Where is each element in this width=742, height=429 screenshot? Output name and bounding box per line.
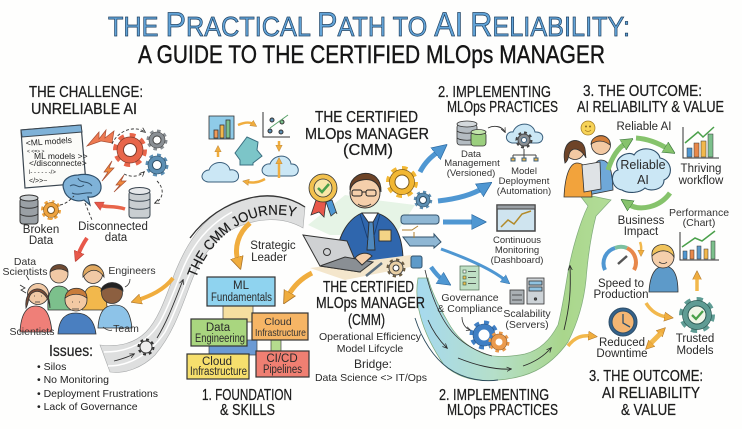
label: continuous monitoring: Continuous xyxy=(493,235,541,246)
label: broken data xyxy=(23,224,59,247)
heading: foundation: & SKILLS xyxy=(220,402,275,419)
arrow: red down xyxy=(78,238,87,255)
label: scientists: Scientists xyxy=(10,326,54,338)
icon: right database xyxy=(129,188,150,218)
heading: outcome bottom: AI RELIABILITY xyxy=(602,385,700,402)
outcome connector arrows xyxy=(568,277,697,346)
heading: implementing top: 2. IMPLEMENTING xyxy=(438,84,551,101)
heading: foundation xyxy=(202,387,292,419)
chart: thriving workflow xyxy=(683,127,719,158)
heading: outcome top: 3. THE OUTCOME: xyxy=(583,83,702,100)
arrow: journey to foundation xyxy=(236,223,250,261)
box: ML fundamentals: Fundamentals xyxy=(211,292,272,304)
icon: code window: </disconnecte> xyxy=(29,158,87,168)
issues list: • Lack of Governance xyxy=(37,401,138,413)
box: ML fundamentals: ML xyxy=(233,280,250,292)
label: data management: (Versioned) xyxy=(447,168,495,179)
icon: teal network xyxy=(235,137,262,165)
icon: desk xyxy=(310,255,420,280)
heading: outcome bottom: & VALUE xyxy=(621,402,676,419)
icon: data management databases xyxy=(457,121,486,146)
blue arrows from manager xyxy=(420,151,505,280)
icon: code window: < <=> > xyxy=(27,149,44,155)
label: governance and compliance xyxy=(437,292,503,315)
panel: AI lifecycle cycle icons xyxy=(202,112,298,183)
box: cloud infrastructure: Infrastructure xyxy=(255,327,306,339)
label: reliable AI top: Reliable AI xyxy=(617,121,671,133)
people with tablet xyxy=(564,136,613,197)
heading: CMM lower: THE CERTIFIED xyxy=(323,279,414,296)
label: scalability xyxy=(503,308,551,331)
heading: outcome bottom: 3. THE OUTCOME: xyxy=(589,368,703,385)
label: broken data: Data xyxy=(29,235,54,247)
icon: certified medal xyxy=(309,174,337,217)
panel: the outcome xyxy=(564,83,729,419)
box: cloud infrastructure: Cloud xyxy=(264,316,292,328)
label: speed to production: Production xyxy=(594,289,648,301)
background blocks xyxy=(209,306,281,355)
icon: chip with bars xyxy=(209,116,234,139)
title: THE PRACTICAL PATH TO AI RELIABILITY: xyxy=(108,6,630,44)
panel: foundation and skills xyxy=(187,277,309,419)
box: cloud infrastructure lower: Cloud xyxy=(202,356,232,368)
label: data management: Data xyxy=(461,149,482,160)
label: strategic leader: Leader xyxy=(251,252,287,264)
label: engineers: Engineers xyxy=(108,265,156,277)
label: continuous monitoring xyxy=(491,235,543,266)
icon: code window: <ML models xyxy=(25,135,72,148)
big swoosh arrow xyxy=(415,193,611,381)
heading: implementing top xyxy=(438,84,558,116)
swoosh direction lines xyxy=(428,266,570,369)
label: business impact: Impact xyxy=(624,226,659,238)
label: strategic leader: Strategic xyxy=(250,240,296,252)
icon: blue gear xyxy=(148,156,166,174)
label: reduced downtime xyxy=(596,337,648,360)
label: data management: Management xyxy=(444,158,500,169)
band arrows xyxy=(114,280,183,361)
issues list: Issues: xyxy=(49,343,93,360)
icon: pipeline tubes xyxy=(401,215,441,268)
heading: implementing bottom xyxy=(439,387,558,419)
text block: CMM details: Bridge: xyxy=(354,357,392,371)
label: scalability: Scalability xyxy=(503,308,551,320)
icon: code window: ML models >> xyxy=(34,151,88,161)
label: speed to production xyxy=(594,278,648,301)
heading: CMM top: MLOps MANAGER xyxy=(305,126,429,143)
label: business impact: Business xyxy=(618,215,665,227)
label: model deployment: Model xyxy=(511,166,537,177)
icon: scatter plot xyxy=(263,112,290,137)
text block: CMM details: Operational Efficiency xyxy=(319,331,422,343)
panel: implementing MLOps practices xyxy=(420,84,558,419)
icon: yellow gear xyxy=(389,169,415,195)
icon: model deployment cloud xyxy=(506,124,543,161)
heading: foundation: 1. FOUNDATION xyxy=(202,387,292,404)
icon: band gear xyxy=(138,340,154,354)
text block: CMM details: Model Lifcycle xyxy=(337,343,403,355)
arrow: red to database xyxy=(100,205,125,209)
icon: left database xyxy=(20,195,38,224)
manager figure xyxy=(335,173,403,262)
box: CI/CD pipelines xyxy=(256,351,309,377)
chart: performance xyxy=(680,231,719,260)
heading: implementing top: MLOps PRACTICES xyxy=(447,99,558,116)
heading: CMM top: (CMM) xyxy=(343,142,393,159)
heading: outcome top xyxy=(577,83,724,116)
icon: servers xyxy=(510,278,544,304)
icon: brain xyxy=(63,174,101,205)
title xyxy=(108,6,630,69)
box: cloud infrastructure lower: Infrastructure xyxy=(190,366,247,378)
label: model deployment xyxy=(497,166,551,197)
heading: implementing bottom: 2. IMPLEMENTING xyxy=(439,387,549,404)
label: disconnected data: data xyxy=(105,232,128,244)
label: performance chart: Performance xyxy=(669,207,729,219)
box: data engineering xyxy=(191,319,247,346)
label: thriving workflow: workflow xyxy=(678,175,724,187)
icon: small orange gear xyxy=(43,202,59,218)
box: data engineering: Engineering xyxy=(195,333,245,345)
arrow: manager to foundation xyxy=(288,273,312,296)
icon: code window: </>>~ xyxy=(29,178,47,185)
label: governance and compliance: Governance xyxy=(441,292,499,304)
heading: CMM lower xyxy=(316,279,425,329)
arrow: data to deployment xyxy=(488,126,505,132)
label: team: Team xyxy=(113,323,139,335)
label: the CMM journey: THE CMM JOURNEY xyxy=(187,204,298,275)
panel: the challenge xyxy=(3,84,166,413)
label: data scientists xyxy=(3,256,47,278)
label: model deployment: (Automation) xyxy=(497,186,551,197)
icon: pen and desk gear xyxy=(366,260,404,276)
label: business impact xyxy=(618,215,665,238)
swoosh outer outline xyxy=(415,318,498,381)
label: strategic leader xyxy=(250,240,296,264)
heading: outcome bottom xyxy=(589,368,703,419)
label: disconnected data xyxy=(78,221,148,244)
box: cloud infrastructure lower xyxy=(187,354,249,379)
icon: left cloud xyxy=(202,162,239,182)
heading: CMM top xyxy=(305,109,429,159)
label: performance chart xyxy=(669,207,729,229)
box: data engineering: Data xyxy=(206,322,231,334)
heading: implementing bottom: MLOps PRACTICES xyxy=(447,402,558,419)
label: trusted models: Models xyxy=(676,345,714,357)
issues list: • Deployment Frustrations xyxy=(37,388,158,400)
icon: green sketch backdrop xyxy=(308,195,415,235)
arrow: impact to man xyxy=(640,242,641,252)
label: thriving workflow: Thriving xyxy=(681,163,721,175)
band top outline xyxy=(190,196,305,238)
label: performance chart: (Chart) xyxy=(683,217,715,229)
icon: speed gauge xyxy=(604,247,636,270)
heading: CMM lower: MLOps MANAGER xyxy=(316,295,425,312)
label: data management xyxy=(444,149,500,179)
label: thriving workflow xyxy=(678,163,724,187)
icon: trusted models gear xyxy=(682,300,712,330)
box: ML fundamentals xyxy=(207,277,275,306)
icon: laptop xyxy=(303,235,373,272)
label: reduced downtime: Reduced xyxy=(599,337,645,349)
issues list: • Silos xyxy=(37,361,66,373)
label: speed to production: Speed to xyxy=(598,278,644,290)
label: broken data: Broken xyxy=(23,224,59,236)
icon: governance checklist xyxy=(460,266,479,290)
heading: the challenge: UNRELIABLE AI xyxy=(31,101,137,118)
arrow: journey to team xyxy=(138,278,173,300)
icon: clock xyxy=(609,308,637,336)
team illustration xyxy=(20,264,132,334)
icon: code window: l- - - - - -/> xyxy=(29,170,56,176)
label: continuous monitoring: Monitoring xyxy=(495,245,539,256)
label: reduced downtime: Downtime xyxy=(596,348,648,360)
subtitle: A GUIDE TO THE CERTIFIED MLOps MANAGER xyxy=(138,41,605,69)
label: continuous monitoring: (Dashboard) xyxy=(491,255,543,266)
swoosh inner outline xyxy=(425,270,492,356)
heading: CMM top: THE CERTIFIED xyxy=(315,109,418,126)
icon: grey gear xyxy=(148,132,166,148)
box: cloud infrastructure xyxy=(252,313,308,340)
issues list xyxy=(37,343,158,413)
icon: reliable AI cloud: AI xyxy=(637,173,649,187)
icon: reliable AI cloud: Reliable xyxy=(620,158,666,172)
band streaks xyxy=(104,212,232,366)
label: scalability: (Servers) xyxy=(505,319,549,331)
icon: reliable AI cloud xyxy=(612,149,670,192)
heading: the challenge xyxy=(29,84,143,118)
icon: right cloud xyxy=(262,156,298,176)
cycle connector arrows xyxy=(218,123,279,183)
sketch connector arrows xyxy=(60,129,162,220)
label: data scientists: Scientists xyxy=(3,266,47,278)
text block: CMM details xyxy=(315,331,427,384)
label: trusted models xyxy=(676,333,714,357)
heading: the challenge: THE CHALLENGE: xyxy=(29,84,143,101)
icon: blue small gear xyxy=(416,192,430,208)
text block: CMM details: Data Science <> IT/Ops xyxy=(315,372,427,384)
label: trusted models: Trusted xyxy=(676,333,714,345)
heading: CMM lower: (CMM) xyxy=(348,312,385,329)
label: model deployment: Deployment xyxy=(499,176,550,187)
icon: large red gear xyxy=(116,136,144,164)
label: data scientists: Data xyxy=(14,256,36,268)
icon: code window xyxy=(21,125,88,188)
label: disconnected data: Disconnected xyxy=(78,221,148,233)
icon: blonde man xyxy=(649,244,678,292)
icon: compliance gears xyxy=(462,317,508,350)
panel: the certified MLOps manager xyxy=(250,109,441,384)
panel: CMM journey band xyxy=(100,195,306,373)
label: governance and compliance: & Compliance xyxy=(437,303,503,315)
journey band xyxy=(100,196,305,372)
icon: lightning bolts xyxy=(87,130,126,192)
green cycle arrows xyxy=(608,138,670,208)
icon: monitoring dashboard xyxy=(497,205,535,231)
icon: smiley xyxy=(581,121,595,135)
box: CI/CD pipelines: CI/CD xyxy=(266,353,298,365)
box: CI/CD pipelines: Pipelines xyxy=(263,364,302,376)
issues list: • No Monitoring xyxy=(37,374,109,386)
